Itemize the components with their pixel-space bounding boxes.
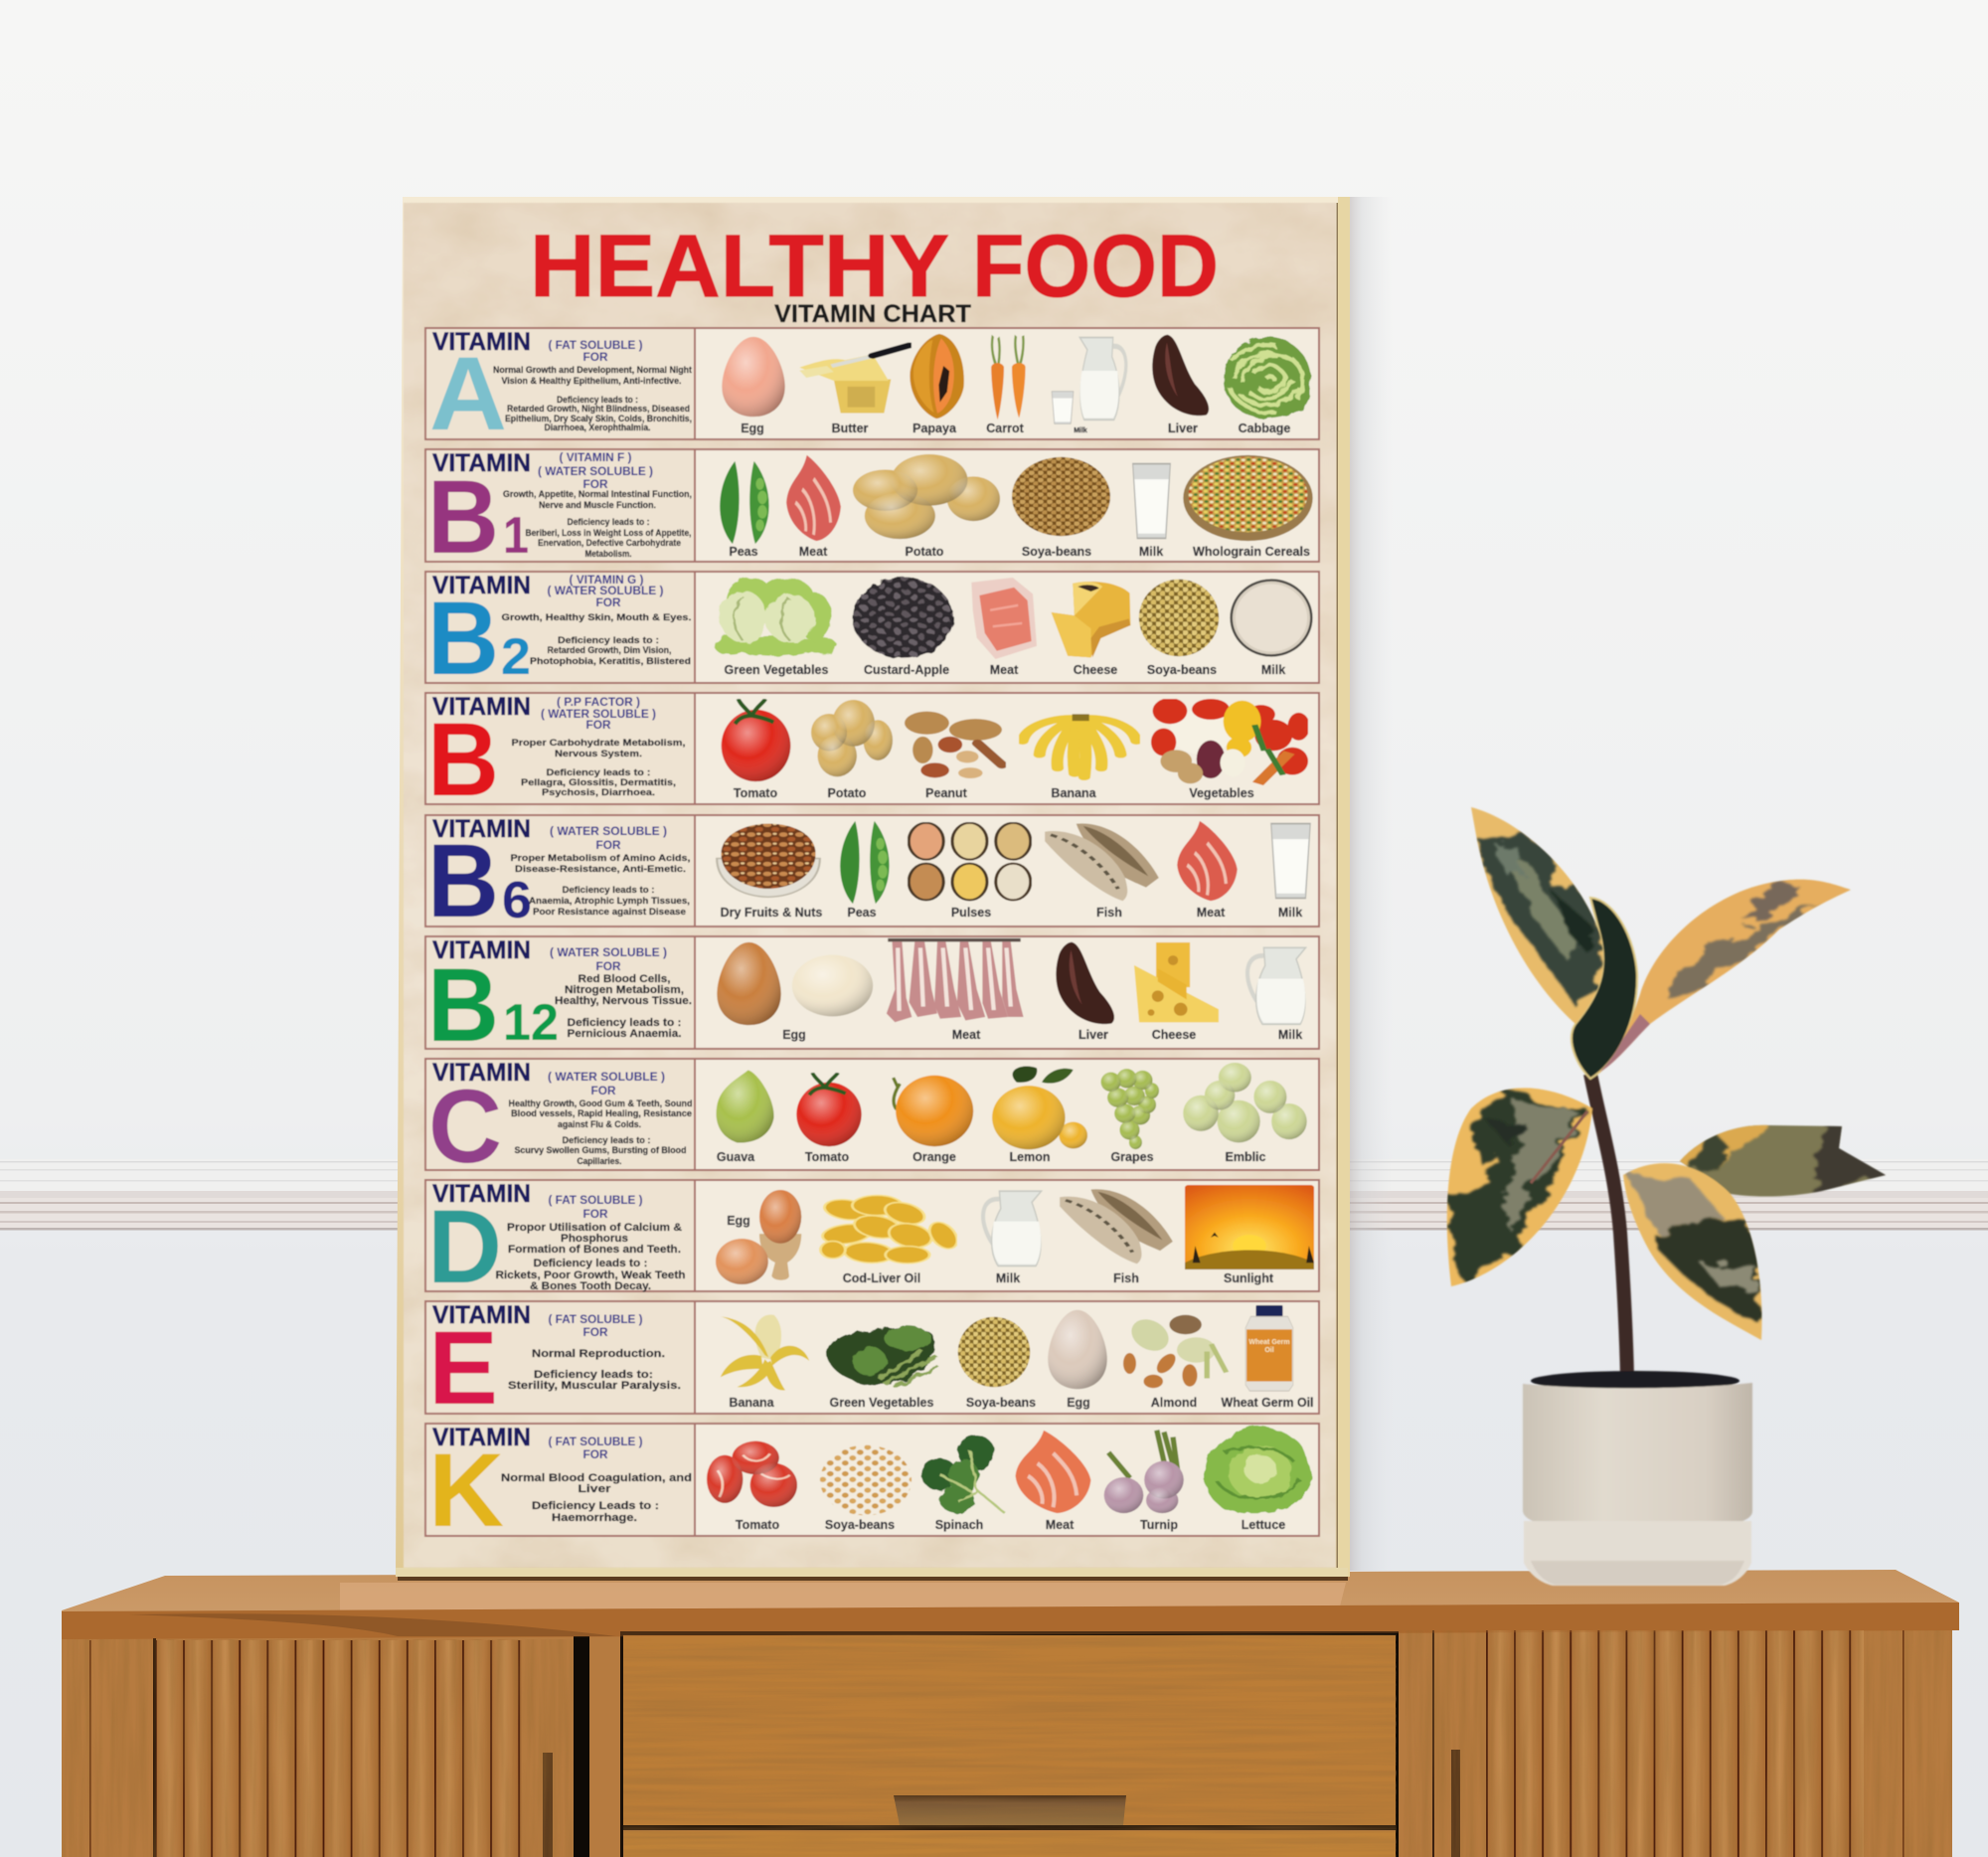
description: vitamin A xyxy=(493,338,692,432)
description: vitamin B1: ( VITAMIN F ) xyxy=(559,450,632,464)
food: tomato xyxy=(707,1441,797,1532)
drawer top gap xyxy=(620,1631,1397,1635)
description: vitamin E xyxy=(508,1312,681,1392)
description: vitamin B2: Growth, Healthy Skin, Mouth & Eyes. xyxy=(501,612,692,622)
description: vitamin B xyxy=(511,695,686,797)
description: vitamin D xyxy=(495,1193,686,1292)
vertical wood grain on left door xyxy=(62,1639,574,1857)
description: vitamin E: FOR xyxy=(582,1325,608,1339)
food: lettuce xyxy=(1205,1426,1312,1532)
food: cod-liver oil: Cod-Liver Oil xyxy=(843,1271,920,1285)
description: vitamin B: ( WATER SOLUBLE ) xyxy=(541,707,656,721)
description: vitamin B1: Deficiency leads to : xyxy=(567,517,650,527)
letter B1: 1 xyxy=(503,507,529,565)
food: wholegrain cereals xyxy=(1183,455,1313,559)
description: vitamin B2: Deficiency leads to : xyxy=(558,635,659,645)
food: tomato: Tomato xyxy=(805,1150,849,1164)
description: vitamin B12: FOR xyxy=(596,959,621,973)
leaf: lower right xyxy=(1622,1162,1763,1340)
panel: vitamin E xyxy=(425,1301,1319,1427)
food: cod-liver oil xyxy=(817,1195,962,1285)
panel: vitamin K xyxy=(425,1424,1319,1549)
vitamin heading: VITAMIN xyxy=(432,693,531,721)
food: milk xyxy=(1052,338,1126,434)
vitamin heading: VITAMIN xyxy=(432,449,531,477)
letter D: D xyxy=(427,1189,502,1305)
plant stem xyxy=(1590,1074,1627,1377)
description: vitamin B6: Deficiency leads to : xyxy=(563,885,655,895)
drawer right gap xyxy=(1396,1631,1399,1857)
food: soya-beans xyxy=(1012,457,1110,559)
letter B12 xyxy=(427,947,559,1064)
description: vitamin C: Blood vessels, Rapid Healing, Resistance xyxy=(511,1108,692,1118)
vertical wood grain on right door xyxy=(1399,1630,1952,1857)
panel: vitamin A xyxy=(425,328,1319,452)
drawer left gap xyxy=(620,1631,623,1857)
vitamin heading: VITAMIN xyxy=(432,1059,531,1087)
food: wheat germ oil: Oil xyxy=(1264,1347,1274,1354)
food: carrot xyxy=(986,336,1026,435)
description: vitamin B12 xyxy=(550,945,692,1040)
lower drawer xyxy=(624,1831,1396,1857)
front edge dark swirl xyxy=(129,1613,616,1636)
food: wheat germ oil xyxy=(1221,1305,1314,1410)
cabinet front edge xyxy=(62,1603,1959,1639)
description: vitamin E: Sterility, Muscular Paralysis. xyxy=(508,1380,681,1392)
description: vitamin C: Deficiency leads to : xyxy=(563,1135,651,1145)
left side stile groove xyxy=(89,1640,91,1857)
food: fish xyxy=(1060,1189,1173,1285)
food: lemon: Lemon xyxy=(1010,1150,1050,1164)
poster paper xyxy=(404,203,1336,1568)
food: green vegetables xyxy=(827,1326,939,1410)
description: vitamin C xyxy=(509,1070,692,1166)
frame right strip xyxy=(1338,197,1350,1577)
food: spinach: Spinach xyxy=(935,1518,983,1532)
food: turnip xyxy=(1104,1431,1184,1532)
leaf: top left xyxy=(1470,806,1604,1024)
description: vitamin E: Deficiency leads to: xyxy=(534,1369,653,1381)
description: vitamin K: Haemorrhage. xyxy=(552,1512,637,1524)
description: vitamin K xyxy=(501,1435,692,1524)
cabinet top surface xyxy=(62,1570,1959,1614)
description: vitamin D: Deficiency leads to : xyxy=(533,1258,648,1269)
food: orange: Orange xyxy=(912,1150,956,1164)
food: grapes xyxy=(1101,1069,1159,1164)
food: cabbage: Cabbage xyxy=(1239,422,1290,435)
left door gap xyxy=(574,1636,589,1857)
poster frame xyxy=(396,197,1350,1577)
vitamin heading: VITAMIN xyxy=(432,1301,531,1329)
description: vitamin B12: Pernicious Anaemia. xyxy=(567,1028,682,1040)
right side stile groove xyxy=(1903,1630,1905,1857)
description: vitamin B1: Growth, Appetite, Normal Intestinal Function, xyxy=(503,489,692,499)
food: sunlight: Sunlight xyxy=(1224,1271,1274,1285)
food: orange xyxy=(894,1076,973,1164)
description: vitamin B6: Poor Resistance against Disease xyxy=(533,907,686,917)
food: carrot: Carrot xyxy=(986,422,1025,435)
description: vitamin C: Capillaries. xyxy=(577,1156,622,1166)
description: vitamin A: Diarrhoea, Xerophthalmia. xyxy=(545,422,650,432)
description: vitamin K: Liver xyxy=(579,1483,611,1495)
description: vitamin B: ( P.P FACTOR ) xyxy=(557,695,640,709)
description: vitamin B6: Disease-Resistance, Anti-Emetic. xyxy=(515,864,686,874)
description: vitamin B1 xyxy=(503,450,692,559)
description: vitamin B12: ( WATER SOLUBLE ) xyxy=(550,945,667,959)
food: meat: Meat xyxy=(1197,906,1226,920)
vitamin heading: VITAMIN xyxy=(432,572,531,599)
food: tomato xyxy=(722,699,790,800)
food: dry fruits and nuts xyxy=(717,824,822,920)
description: vitamin D: Propor Utilisation of Calcium & xyxy=(507,1222,682,1234)
panel: vitamin B xyxy=(425,693,1319,818)
letter B2: 2 xyxy=(501,628,531,686)
description: vitamin B2 xyxy=(501,573,692,666)
wood grain on edge and top xyxy=(62,1603,1959,1639)
drawer handle cut-out xyxy=(894,1795,1126,1825)
door handle left xyxy=(543,1753,553,1857)
food: dry fruits and nuts: Dry Fruits & Nuts xyxy=(721,906,822,920)
description: vitamin B1: Beriberi, Loss in Weight Loss of Appetite, xyxy=(525,528,692,538)
description: vitamin A: Normal Growth and Development, Normal Night xyxy=(493,365,692,375)
food: potato xyxy=(853,454,1000,559)
wood grain on drawers xyxy=(623,1634,1397,1857)
letter C: C xyxy=(428,1069,502,1185)
food: peas xyxy=(720,461,769,559)
description: vitamin K: ( FAT SOLUBLE ) xyxy=(549,1435,642,1448)
food: milk: Milk xyxy=(1139,545,1163,559)
description: vitamin D: Formation of Bones and Teeth. xyxy=(508,1244,681,1256)
panel: vitamin C xyxy=(425,1059,1319,1185)
food: butter xyxy=(799,345,910,435)
frame inner line xyxy=(1336,203,1338,1568)
food: meat xyxy=(971,578,1037,677)
food: meat: Meat xyxy=(990,663,1019,677)
food: tomato xyxy=(796,1073,862,1164)
food: custard-apple xyxy=(853,578,953,677)
food: banana: Banana xyxy=(1051,786,1097,800)
description: vitamin K: Deficiency Leads to : xyxy=(532,1500,659,1512)
food: potato: Potato xyxy=(906,545,944,559)
description: vitamin B2: FOR xyxy=(596,595,621,609)
vitamin heading: VITAMIN xyxy=(432,815,531,843)
door handle right xyxy=(1451,1750,1460,1857)
description: vitamin B1: Enervation, Defective Carbohydrate xyxy=(538,538,681,548)
food: banana xyxy=(1023,714,1136,800)
left door shadow xyxy=(153,1638,156,1857)
description: vitamin C: ( WATER SOLUBLE ) xyxy=(548,1070,665,1084)
food: guava: Guava xyxy=(717,1150,755,1164)
letter B2: B xyxy=(427,581,499,697)
description: vitamin D: Rickets, Poor Growth, Weak Teeth xyxy=(495,1269,686,1281)
food: hanging meat xyxy=(887,938,1024,1042)
description: vitamin B: Psychosis, Diarrhoea. xyxy=(542,787,655,797)
description: vitamin K: Normal Blood Coagulation, and xyxy=(501,1472,692,1484)
food: milk: Milk xyxy=(1261,663,1285,677)
food: sunlight xyxy=(1185,1185,1314,1285)
upper drawer xyxy=(623,1634,1397,1827)
food: vegetables xyxy=(1151,698,1310,800)
description: vitamin B6 xyxy=(511,824,690,917)
description: vitamin C: FOR xyxy=(590,1084,616,1097)
food: fish xyxy=(1045,823,1159,920)
food: soya-beans: Soya-beans xyxy=(1022,545,1091,559)
pot saucer xyxy=(1524,1521,1751,1586)
description: vitamin B: Pellagra, Glossitis, Dermatitis, xyxy=(521,777,676,787)
description: vitamin B1: FOR xyxy=(582,477,608,491)
vitamin heading: VITAMIN xyxy=(432,1180,531,1208)
description: vitamin B1: ( WATER SOLUBLE ) xyxy=(538,464,653,478)
food: soya-beans xyxy=(820,1445,911,1532)
food: wheat germ oil: Wheat Germ xyxy=(1248,1339,1290,1346)
food: cheese xyxy=(1134,942,1219,1042)
vitamin heading: VITAMIN xyxy=(432,328,531,356)
food: grapes: Grapes xyxy=(1110,1150,1154,1164)
food: fish: Fish xyxy=(1113,1271,1139,1285)
poster xyxy=(404,203,1336,1568)
letter B12: B xyxy=(427,947,499,1064)
food: egg white xyxy=(792,955,873,1016)
description: vitamin D: FOR xyxy=(582,1207,608,1221)
food: milk xyxy=(1247,947,1306,1042)
description: vitamin B12: Red Blood Cells, xyxy=(579,973,670,985)
letter B1: B xyxy=(427,459,499,576)
food: almond: Almond xyxy=(1151,1396,1197,1410)
vitamin heading: VITAMIN xyxy=(432,1424,531,1451)
right slatted door xyxy=(1486,1630,1864,1857)
frame bottom shadow xyxy=(398,1577,1348,1581)
food: meat: Meat xyxy=(1046,1518,1075,1532)
letter E: E xyxy=(428,1310,498,1427)
food: egg xyxy=(722,337,785,435)
food: egg: Egg xyxy=(1067,1396,1090,1410)
left slatted door xyxy=(155,1640,522,1857)
food: tomato: Tomato xyxy=(734,786,777,800)
food: meat xyxy=(1177,821,1238,920)
food: liver xyxy=(1152,335,1209,435)
title: FOOD xyxy=(972,216,1219,315)
leaf: dark inner xyxy=(1572,898,1637,1079)
food: green vegetables xyxy=(714,579,837,677)
food: cheese: Cheese xyxy=(1074,663,1117,677)
food: egg xyxy=(1048,1310,1107,1410)
food: butter: Butter xyxy=(832,422,869,435)
food: meat xyxy=(1016,1431,1090,1532)
description: vitamin B: Deficiency leads to : xyxy=(547,767,651,777)
description: vitamin K: FOR xyxy=(582,1447,608,1461)
food: emblic xyxy=(1183,1063,1307,1164)
food: lettuce: Lettuce xyxy=(1242,1518,1285,1532)
potted plant xyxy=(1441,800,1894,1586)
letter B12: 12 xyxy=(503,994,559,1052)
description: vitamin E: ( FAT SOLUBLE ) xyxy=(549,1312,642,1326)
food: emblic: Emblic xyxy=(1225,1150,1266,1164)
food: milk: Milk xyxy=(1074,427,1087,434)
title: HEALTHY xyxy=(530,216,949,315)
description: vitamin D: ( FAT SOLUBLE ) xyxy=(549,1193,642,1207)
vitamin heading: VITAMIN xyxy=(432,936,531,964)
panel: vitamin B12 xyxy=(425,936,1319,1064)
panel: vitamin B6 xyxy=(425,815,1319,939)
description: vitamin B1: Metabolism. xyxy=(584,549,632,559)
description: vitamin B: FOR xyxy=(586,718,611,732)
description: vitamin A: Vision & Healthy Epithelium, Anti-infective. xyxy=(501,376,682,386)
food: wheat germ oil: Wheat Germ Oil xyxy=(1221,1396,1314,1410)
food: soya-beans: Soya-beans xyxy=(966,1396,1036,1410)
food: pulses: Pulses xyxy=(951,906,991,920)
letter B: B xyxy=(427,702,499,818)
food: papaya xyxy=(910,334,964,435)
description: vitamin E: Normal Reproduction. xyxy=(532,1348,665,1360)
wall moulding xyxy=(0,1159,1988,1231)
food: liver: Liver xyxy=(1168,422,1198,435)
title xyxy=(530,216,1219,315)
food: vegetables: Vegetables xyxy=(1189,786,1254,800)
food: spinach xyxy=(921,1435,1004,1532)
wall shadow beside poster xyxy=(1349,197,1393,1571)
letter A: A xyxy=(429,336,507,452)
food: potato xyxy=(811,700,893,800)
description: vitamin B2: ( WATER SOLUBLE ) xyxy=(547,584,664,597)
food: fish: Fish xyxy=(1096,906,1122,920)
description: vitamin B6: FOR xyxy=(596,838,621,852)
cabinet body xyxy=(62,1622,1952,1857)
panel: vitamin B1 xyxy=(425,449,1319,576)
food: peas xyxy=(840,821,890,920)
description: vitamin C: against Flu & Colds. xyxy=(558,1119,641,1129)
food: liver: Liver xyxy=(1078,1028,1108,1042)
food: milk xyxy=(1232,581,1311,677)
food: peas: Peas xyxy=(847,906,877,920)
food: soya-beans xyxy=(958,1317,1036,1410)
panel: vitamin B2 xyxy=(425,572,1319,697)
food: peanut xyxy=(905,712,1002,800)
food: peas: Peas xyxy=(729,545,758,559)
description: vitamin B6: Proper Metabolism of Amino Acids, xyxy=(511,853,690,863)
description: vitamin C: Scurvy Swollen Gums, Bursting of Blood xyxy=(515,1145,686,1155)
description: vitamin B12: Deficiency leads to : xyxy=(567,1017,682,1029)
description: vitamin B6: Anaemia, Atrophic Lymph Tissues, xyxy=(529,896,690,906)
food: tomato: Tomato xyxy=(736,1518,779,1532)
description: vitamin A: ( FAT SOLUBLE ) xyxy=(549,338,642,352)
food: milk xyxy=(983,1191,1042,1285)
food: milk: Milk xyxy=(996,1271,1020,1285)
description: vitamin D: Phosphorus xyxy=(561,1233,628,1245)
food: cheese xyxy=(1052,582,1130,677)
food: almond xyxy=(1123,1315,1227,1410)
food: milk: Milk xyxy=(1278,1028,1302,1042)
wooden cabinet xyxy=(62,1570,1959,1857)
food: lemon xyxy=(992,1067,1087,1164)
right door edge line xyxy=(1432,1630,1434,1857)
description: vitamin B6: ( WATER SOLUBLE ) xyxy=(550,824,667,838)
description: vitamin B1: Nerve and Muscle Function. xyxy=(539,500,656,510)
food: banana xyxy=(721,1314,809,1410)
description: vitamin D: & Bones Tooth Decay. xyxy=(530,1280,651,1292)
subtitle: VITAMIN CHART xyxy=(774,300,971,328)
leaf: left xyxy=(1441,1079,1600,1292)
food: wholegrain cereals: Wholograin Cereals xyxy=(1193,545,1310,559)
description: vitamin B2: Photophobia, Keratitis, Blistered xyxy=(530,656,691,666)
description: vitamin A: Retarded Growth, Night Blindness, Diseased xyxy=(507,404,690,414)
description: vitamin B12: Nitrogen Metabolism, xyxy=(565,984,684,996)
drawer divider xyxy=(623,1825,1397,1830)
leaf: far right xyxy=(1679,1123,1887,1197)
food: soya-beans: Soya-beans xyxy=(825,1518,895,1532)
poster reflection on cabinet top xyxy=(340,1583,1346,1610)
food: soya-beans: Soya-beans xyxy=(1147,663,1217,677)
description: vitamin B2: ( VITAMIN G ) xyxy=(569,573,644,587)
food: turnip: Turnip xyxy=(1140,1518,1178,1532)
food: egg: Egg xyxy=(782,1028,806,1042)
food: peanut: Peanut xyxy=(925,786,968,800)
pot soil xyxy=(1531,1371,1740,1391)
letter B6: 6 xyxy=(502,872,532,929)
description: vitamin A: FOR xyxy=(582,350,608,364)
description: vitamin B: Nervous System. xyxy=(555,749,642,759)
food: liver xyxy=(1056,942,1114,1042)
food: meat: Meat xyxy=(799,545,828,559)
description: vitamin B2: Retarded Growth, Dim Vision, xyxy=(547,645,672,655)
food: potato: Potato xyxy=(828,786,867,800)
food: hanging meat: Meat xyxy=(952,1028,981,1042)
pot body xyxy=(1523,1383,1752,1524)
food: cheese: Cheese xyxy=(1152,1028,1196,1042)
food: green vegetables: Green Vegetables xyxy=(725,663,829,677)
description: vitamin B: Proper Carbohydrate Metabolism, xyxy=(511,738,686,748)
food: egg xyxy=(717,942,806,1042)
food: meat xyxy=(786,455,841,559)
food: pulses xyxy=(909,823,1031,920)
description: vitamin A: Deficiency leads to : xyxy=(557,395,638,405)
food: banana: Banana xyxy=(729,1396,775,1410)
food: milk xyxy=(1271,824,1310,920)
panel: vitamin D xyxy=(425,1180,1319,1305)
letter K: K xyxy=(428,1433,504,1549)
description: vitamin C: Healthy Growth, Good Gum & Teeth, Sound xyxy=(509,1098,692,1108)
food: soya-beans xyxy=(1139,580,1219,677)
frame bottom bar xyxy=(396,1568,1348,1577)
food: milk: Milk xyxy=(1278,906,1302,920)
leaf: right top xyxy=(1598,879,1851,1073)
food: egg: Egg xyxy=(741,422,764,435)
food: cabbage xyxy=(1225,338,1310,435)
food: milk xyxy=(1133,464,1170,559)
food: guava xyxy=(717,1071,774,1164)
food: custard-apple: Custard-Apple xyxy=(864,663,949,677)
food: papaya: Papaya xyxy=(912,422,957,435)
food: green vegetables: Green Vegetables xyxy=(830,1396,934,1410)
food: egg: Egg xyxy=(727,1214,750,1228)
description: vitamin B12: Healthy, Nervous Tissue. xyxy=(555,995,692,1007)
food: egg xyxy=(716,1190,801,1284)
letter B6: B xyxy=(427,823,499,939)
description: vitamin A: Epithelium, Dry Scaly Skin, Colds, Bronchitis, xyxy=(505,414,692,423)
